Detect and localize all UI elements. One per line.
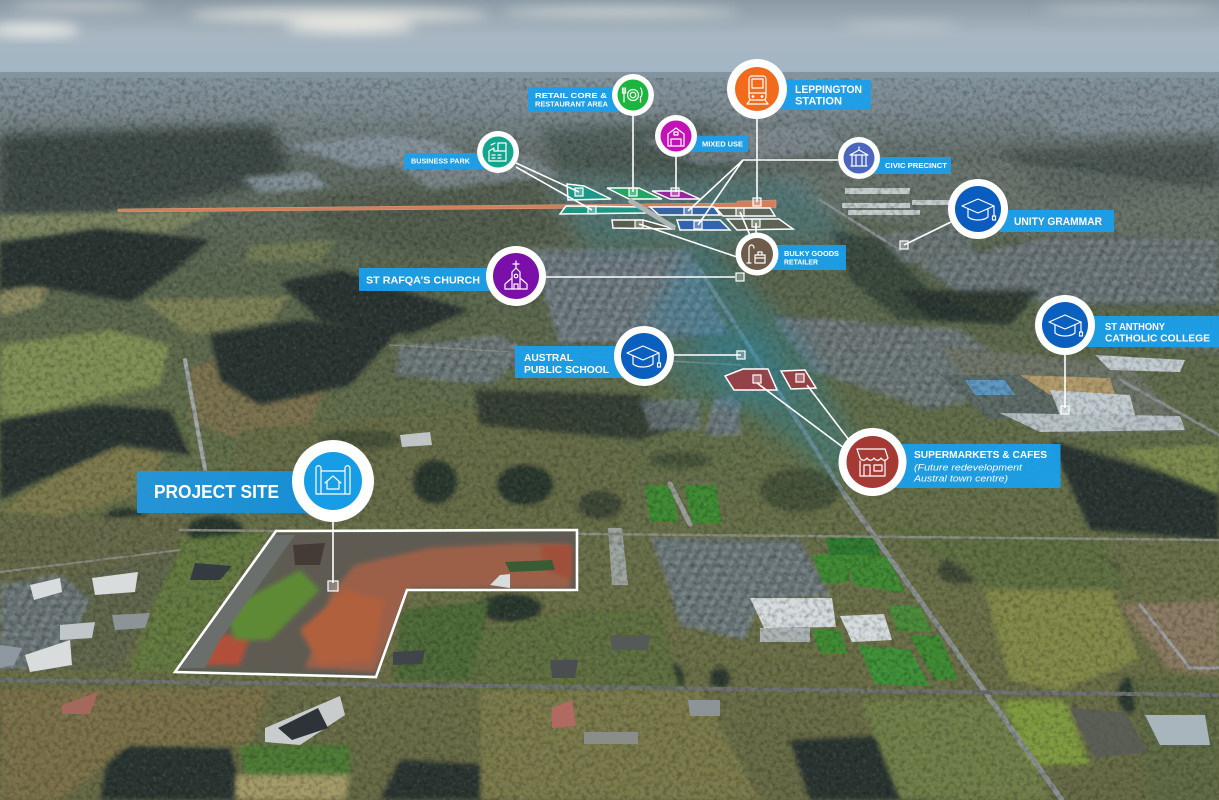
icon: building xyxy=(668,128,684,146)
callout: bulky goods retailer xyxy=(736,232,846,276)
label bar xyxy=(1085,316,1219,347)
badge xyxy=(948,179,1008,239)
label bar xyxy=(885,444,1060,488)
icon: graduation cap xyxy=(962,199,996,220)
neighbouring housing estate xyxy=(0,395,830,670)
badge xyxy=(727,59,787,119)
callout: leppington station xyxy=(727,59,871,119)
label text: PROJECT SITE xyxy=(154,481,279,502)
zone: mixed use xyxy=(652,191,700,199)
badge xyxy=(736,232,778,276)
label text: LEPPINGTON xyxy=(795,84,862,96)
dark far tree belts xyxy=(0,120,1219,255)
label text: ST ANTHONY xyxy=(1105,321,1165,333)
callout: business park xyxy=(404,131,519,173)
warehouses xyxy=(842,188,952,215)
badge xyxy=(614,326,674,386)
mid suburbs xyxy=(395,225,1219,410)
left pastures xyxy=(0,210,640,525)
label bar xyxy=(1000,210,1114,232)
label bar xyxy=(870,157,951,174)
callout: austral public school: PUBLIC SCHOOL xyxy=(524,364,610,376)
central road xyxy=(629,200,675,228)
greenhouses xyxy=(608,528,892,642)
callout: bulky goods retailer: RETAILER xyxy=(784,258,818,266)
zone: civic south xyxy=(677,220,730,230)
project site boundary xyxy=(175,530,577,677)
label bar xyxy=(772,245,846,270)
school buildings xyxy=(940,355,1185,432)
label bar xyxy=(690,136,748,152)
badge xyxy=(655,115,697,157)
label bar xyxy=(359,268,494,291)
location markers xyxy=(328,188,1069,591)
badge xyxy=(292,440,374,522)
icon: sofa and lamp xyxy=(747,245,765,263)
dark tree masses xyxy=(0,228,1219,800)
label text: ST RAFQA’S CHURCH xyxy=(366,274,480,286)
zone: civic north xyxy=(650,207,720,215)
label text: CIVIC PRECINCT xyxy=(885,161,947,170)
clouds xyxy=(0,2,1219,37)
roofs and houses xyxy=(0,432,1210,758)
callout: retail core and restaurant area xyxy=(528,74,654,116)
icon: civic building xyxy=(850,147,868,166)
label bar xyxy=(137,471,312,513)
label bar xyxy=(404,153,488,169)
callout: supermarkets and cafes xyxy=(838,428,1060,496)
callout: project site xyxy=(137,440,374,522)
label text: BULKY GOODS xyxy=(784,249,839,258)
roads xyxy=(0,200,1219,800)
callout: unity grammar xyxy=(948,179,1114,239)
callout: austral public school xyxy=(515,326,674,386)
callout: retail core and restaurant area: RESTAURANT AREA xyxy=(535,100,608,108)
scattered tree clusters xyxy=(0,430,1142,797)
blue tint corridor xyxy=(640,235,870,480)
callout: st anthony catholic college xyxy=(1035,295,1219,355)
bright green fields xyxy=(645,485,958,686)
distant suburbs xyxy=(240,100,1219,192)
icon: graduation cap xyxy=(627,346,660,367)
austral town centre zones xyxy=(725,369,816,390)
badge xyxy=(486,246,546,306)
label text: AUSTRAL xyxy=(524,352,574,364)
label text: RETAIL CORE & xyxy=(535,91,608,100)
description: (Future redevelopment xyxy=(914,462,1023,472)
zone: supermarket east xyxy=(781,370,816,389)
callout: st rafqa's church xyxy=(359,246,546,306)
zone: retail core xyxy=(607,188,662,199)
label bar xyxy=(528,87,620,112)
badge xyxy=(1035,295,1095,355)
callout: supermarkets and cafes: Austral town centre) xyxy=(913,474,1008,484)
label bar xyxy=(515,346,625,378)
zone: bulky goods west xyxy=(612,220,675,229)
badge xyxy=(838,137,880,179)
label text: BUSINESS PARK xyxy=(411,156,470,166)
right side zones xyxy=(0,345,1219,800)
icon: blueprint house xyxy=(316,466,350,494)
leppington precinct zones xyxy=(118,184,793,230)
connector lines xyxy=(333,116,1065,583)
label text: UNITY GRAMMAR xyxy=(1014,216,1102,228)
zone: bulky goods south xyxy=(727,219,793,230)
icon: train xyxy=(747,76,768,104)
sky xyxy=(0,0,1219,78)
icon: shop xyxy=(857,449,888,476)
zone: business park north xyxy=(567,184,611,200)
badge xyxy=(477,131,519,173)
site ground xyxy=(175,530,577,677)
label text: MIXED USE xyxy=(702,140,743,148)
badge xyxy=(838,428,906,496)
callout: civic precinct xyxy=(838,137,951,179)
icon: graduation cap xyxy=(1049,315,1082,336)
zone: business park south xyxy=(560,206,645,214)
icon: church xyxy=(505,261,527,289)
icon: factory xyxy=(489,143,506,161)
zone: supermarket west xyxy=(725,369,777,390)
callout: mixed use xyxy=(655,115,748,157)
label bar xyxy=(775,80,871,110)
callout: leppington station: STATION xyxy=(795,96,842,108)
zone: bulky goods east xyxy=(716,208,775,216)
callout: st anthony catholic college: CATHOLIC COLLEGE xyxy=(1105,332,1210,344)
rail line band xyxy=(118,200,776,212)
label text: SUPERMARKETS & CAFES xyxy=(914,449,1047,461)
icon: plate and cutlery xyxy=(622,88,642,102)
badge xyxy=(612,74,654,116)
